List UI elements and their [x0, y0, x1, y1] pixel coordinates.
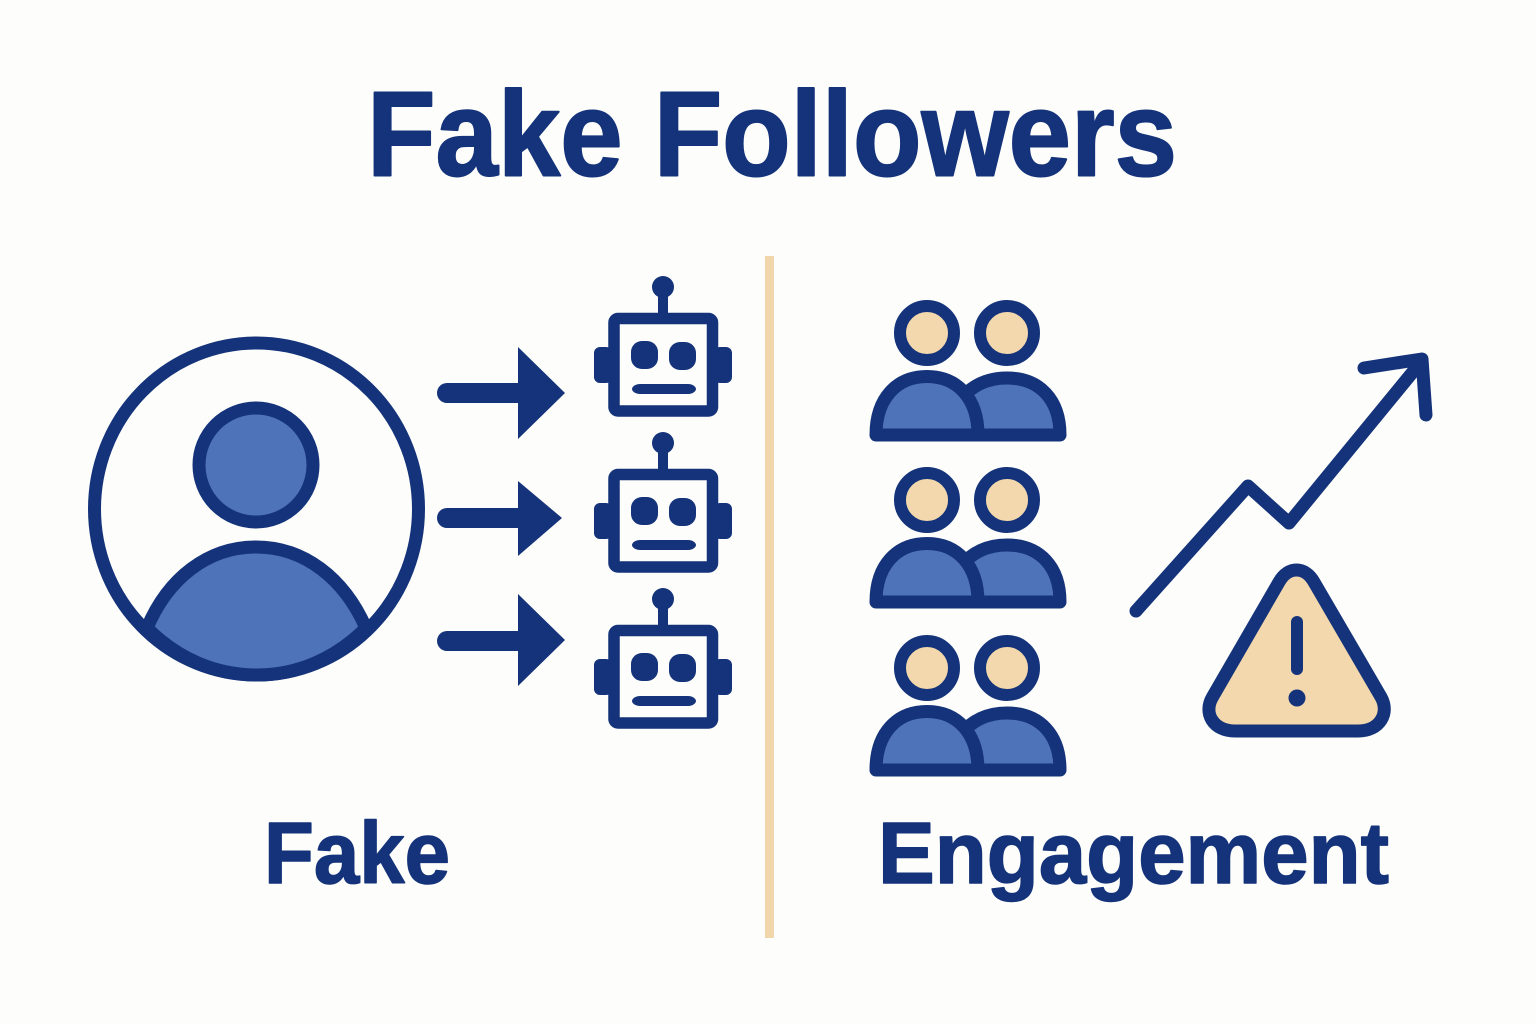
icon: warning triangle: [1209, 570, 1384, 731]
divider between panels: [765, 256, 774, 938]
icon: robot bottom: [594, 588, 732, 723]
icon: people row 3: [876, 641, 1060, 770]
arrow: bottom: [437, 594, 565, 686]
title: Fake Followers: [367, 66, 1177, 202]
arrow: middle: [437, 481, 562, 556]
arrow: top: [437, 347, 565, 439]
icon: user profile in circle: [94, 343, 418, 675]
label: fake: Fake: [264, 805, 450, 902]
icon: rising trend arrow: [1136, 359, 1426, 611]
panel: engagement: [876, 306, 1426, 902]
icon: people row 2: [876, 473, 1060, 602]
panel: fake: [94, 276, 732, 902]
icon: robot middle: [594, 432, 732, 567]
icon: people row 1: [876, 306, 1060, 435]
label: engagement: Engagement: [878, 805, 1389, 902]
icon: robot top: [594, 276, 732, 411]
